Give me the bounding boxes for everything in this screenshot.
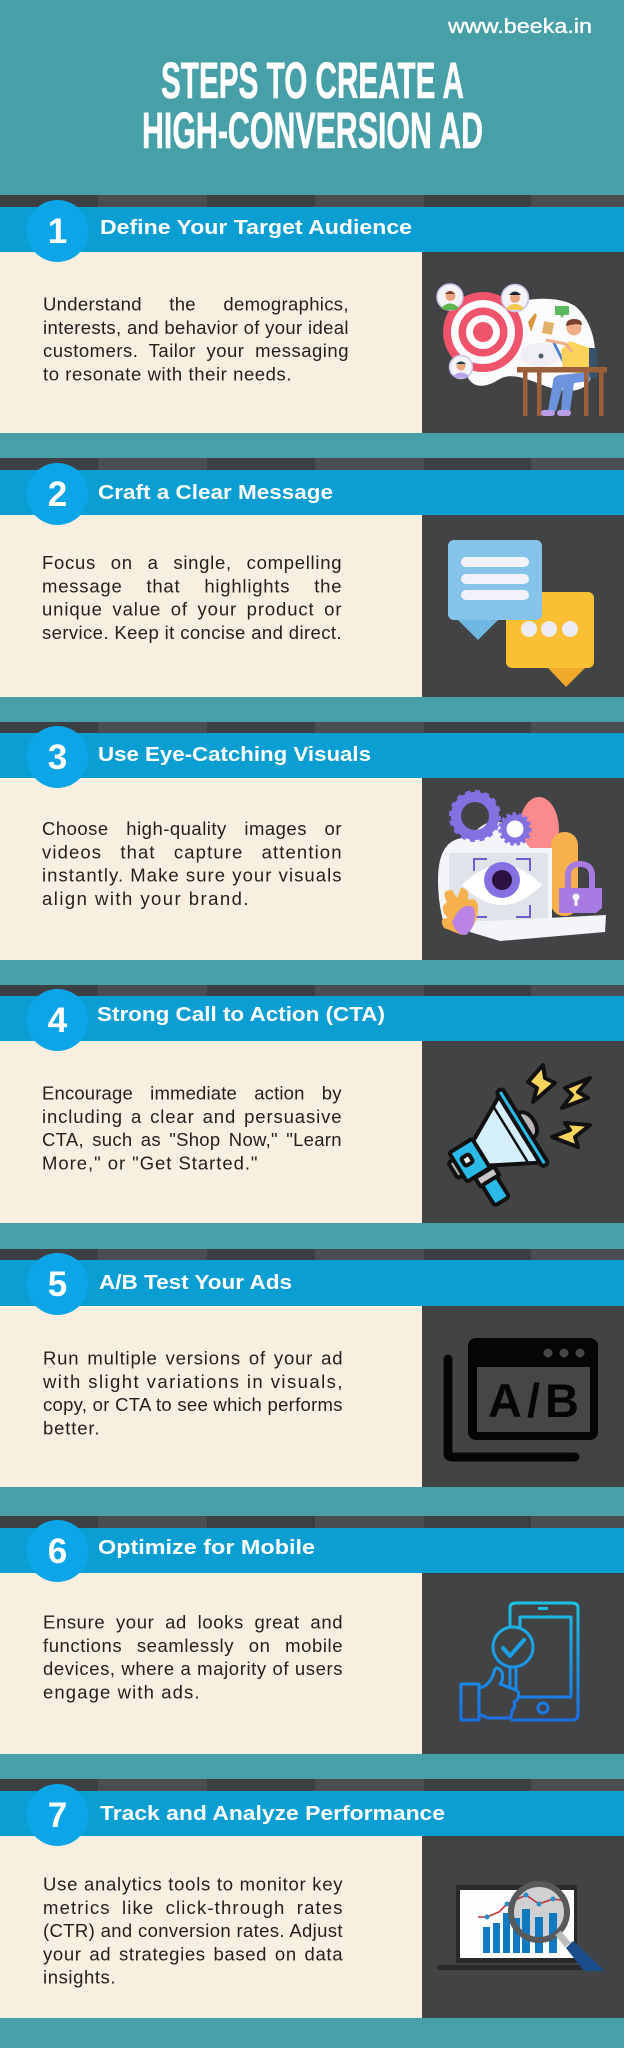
step 1 text [43, 294, 349, 384]
step 4 number: 4 [48, 1001, 68, 1040]
step 3 text [42, 818, 342, 909]
panel: step 6 [0, 1516, 624, 1754]
step 4 text [42, 1082, 342, 1174]
step 6 heading: Optimize for Mobile [98, 1537, 315, 1559]
step 6 text: functions seamlessly on mobile [43, 1635, 343, 1656]
step 1 text: interests, and behavior of your ideal [43, 317, 349, 338]
icon: speech bubbles [448, 540, 594, 687]
icon: eye and lock [438, 792, 606, 941]
step 2 text: message that highlights the [42, 575, 342, 596]
step 6 text: engage with ads. [43, 1682, 200, 1702]
step 2 text: service. Keep it concise and direct. [42, 622, 342, 643]
step 3 text: videos that capture attention [42, 841, 342, 862]
step 2 heading: Craft a Clear Message [98, 482, 333, 504]
panel: step 2 [0, 458, 624, 697]
step 3 number: 3 [48, 738, 67, 777]
step 5 text [42, 1348, 343, 1438]
step 5 number: 5 [48, 1265, 67, 1304]
step 4 number [26, 989, 88, 1051]
step 1 number [26, 200, 88, 262]
step 6 number [26, 1520, 88, 1582]
panel: step 1 [0, 195, 624, 433]
step 3 text: align with your brand. [42, 888, 249, 909]
step 3 heading: Use Eye-Catching Visuals [98, 744, 371, 766]
panel: step 7 [0, 1779, 624, 2018]
step 5 text: better. [43, 1418, 100, 1438]
panel: step 3 [0, 722, 624, 960]
step 7 text [43, 1874, 343, 1988]
step 3 text: instantly. Make sure your visuals [42, 865, 342, 886]
title [142, 52, 483, 159]
step 1 heading: Define Your Target Audience [100, 217, 412, 239]
icon: phone approval [461, 1603, 578, 1720]
step 5 text: with slight variations in visuals, [42, 1371, 343, 1392]
step 2 number [26, 463, 88, 525]
step 5 text: copy, or CTA to see which performs [43, 1394, 343, 1415]
icon: analytics chart with magnifier [437, 1884, 605, 1971]
step 7 heading: Track and Analyze Performance [100, 1803, 445, 1825]
step 5 number [26, 1253, 88, 1315]
panel: step 5 [0, 1249, 624, 1487]
step 1 text: customers. Tailor your messaging [43, 340, 349, 361]
step 2 text: Focus on a single, compelling [42, 552, 342, 573]
step 4 text: CTA, such as "Shop Now," "Learn [42, 1129, 342, 1150]
step 6 text: Ensure your ad looks great and [43, 1612, 343, 1632]
step 1 text: Understand the demographics, [43, 294, 349, 314]
step 7 text: Use analytics tools to monitor key [43, 1874, 343, 1894]
step 5 heading: A/B Test Your Ads [99, 1272, 292, 1294]
step 3 number [26, 726, 88, 788]
step 6 text [43, 1612, 343, 1702]
panel: step 4 [0, 985, 624, 1223]
step 7 text: your ad strategies based on data [43, 1944, 343, 1964]
step 6 number: 6 [48, 1532, 67, 1571]
step 6 text: devices, where a majority of users [43, 1658, 343, 1679]
step 2 text [42, 552, 342, 643]
step 2 number: 2 [48, 475, 67, 514]
step 2 text: unique value of your product or [42, 599, 342, 620]
step 5 text: Run multiple versions of your ad [43, 1348, 343, 1368]
step 7 text: (CTR) and conversion rates. Adjust [43, 1920, 343, 1941]
website url: www.beeka.in [447, 16, 592, 38]
icon: A/B test window [448, 1338, 598, 1457]
step 1 number: 1 [48, 212, 67, 251]
step 1 text: to resonate with their needs. [43, 364, 292, 384]
step 4 text: including a clear and persuasive [42, 1106, 342, 1127]
step 4 text: Encourage immediate action by [42, 1082, 342, 1104]
icon: target audience [437, 284, 607, 416]
step 7 number [26, 1784, 88, 1846]
step 7 text: insights. [43, 1966, 116, 1988]
icon: megaphone [430, 1065, 590, 1215]
step 4 heading: Strong Call to Action (CTA) [97, 1004, 385, 1026]
step 3 text: Choose high-quality images or [42, 818, 342, 839]
icon: A/B test window: A/B [488, 1374, 579, 1427]
step 7 text: metrics like click-through rates [43, 1897, 343, 1918]
step 4 text: More," or "Get Started." [42, 1152, 258, 1174]
step 7 number: 7 [48, 1796, 67, 1835]
